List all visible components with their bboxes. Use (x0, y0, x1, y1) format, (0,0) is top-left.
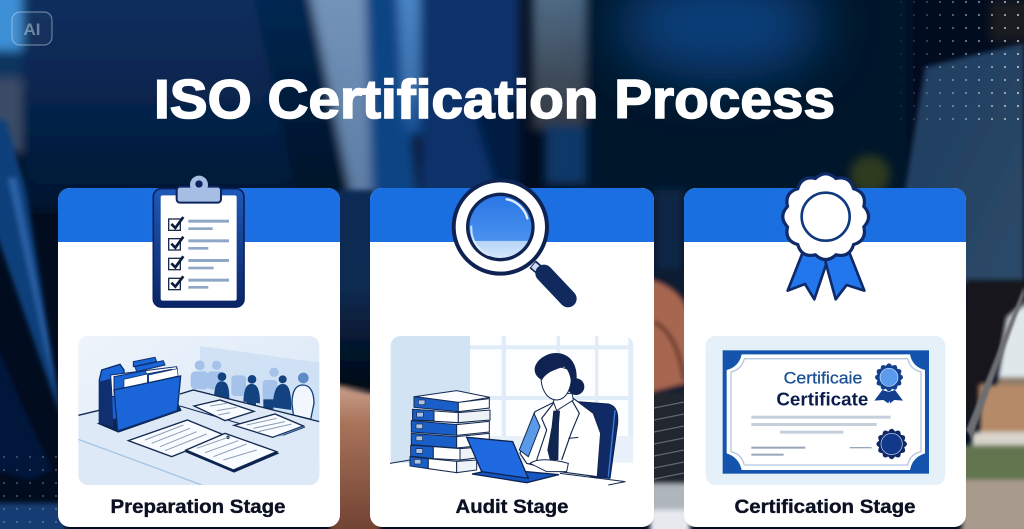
icon: award rosette (783, 174, 869, 299)
certificate text: Certificaie (784, 368, 862, 387)
right side laptop and desk (960, 280, 1024, 529)
illustration: framed certificate: Certificate (776, 388, 868, 409)
illustration: auditor at laptop with binders (390, 336, 633, 487)
chair (577, 402, 618, 478)
body (520, 398, 601, 477)
left edge streaks (0, 120, 65, 529)
folder (97, 403, 182, 433)
papers on table (194, 400, 254, 421)
illustration: folder, papers and team on table (78, 336, 319, 485)
panel: preparation stage card (58, 176, 340, 527)
seal (876, 429, 907, 459)
gap and hand between first cards (330, 190, 380, 529)
panel: audit stage card (370, 178, 654, 527)
panel: certification stage card (684, 174, 966, 527)
label: preparation stage: Preparation Stage (110, 497, 286, 518)
label: audit stage: Audit Stage (456, 497, 568, 518)
laptop (472, 472, 559, 483)
AI watermark badge: AI (24, 20, 40, 39)
hand (530, 460, 568, 472)
certificate text lines (751, 416, 891, 434)
title: ISO Certification Process (154, 68, 835, 130)
icon: clipboard checklist (153, 176, 244, 307)
illustration: framed certificate (706, 336, 945, 485)
binder stack (410, 391, 490, 473)
AI watermark badge (12, 12, 52, 45)
small rosette (874, 363, 903, 403)
head (568, 378, 584, 395)
label: certification stage: Certification Stage (734, 497, 916, 518)
icon: magnifying glass (452, 178, 568, 299)
hand and keyboard between second cards (650, 270, 690, 529)
